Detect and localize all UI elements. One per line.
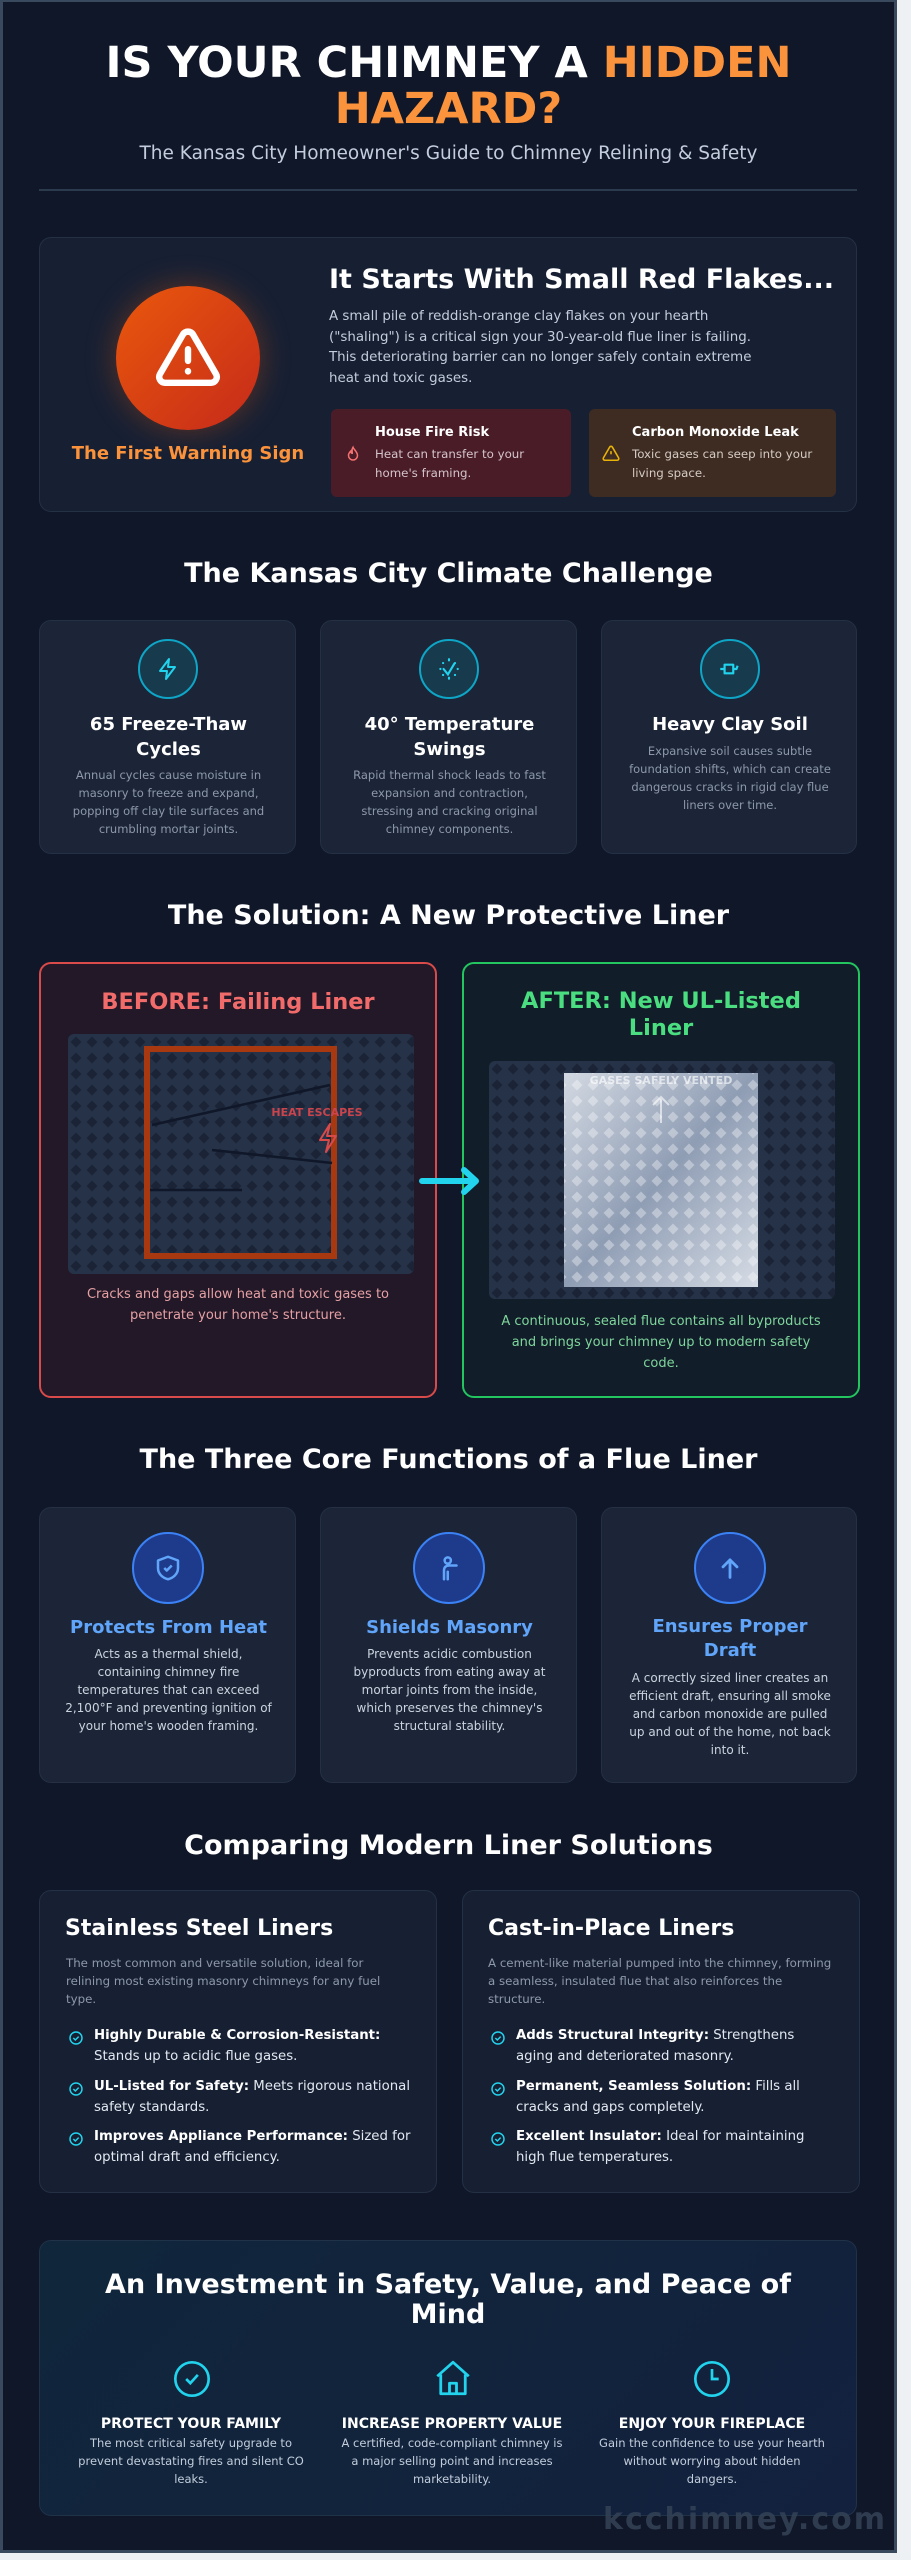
- callout: carbon monoxide: Carbon Monoxide Leak: [632, 425, 799, 440]
- panel: after: Liner: [629, 1015, 693, 1041]
- card: temperature swings: Swings: [413, 739, 486, 760]
- column: enjoy fireplace: [599, 2361, 825, 2486]
- panel: first warning sign: [39, 237, 857, 512]
- panel: after: [462, 962, 860, 1398]
- caption: [87, 1287, 389, 1323]
- callout: carbon monoxide: living space.: [632, 466, 706, 480]
- panel: investment: marketability.: [413, 2472, 491, 2486]
- panel: cast-in-place: a seamless, insulated flue that also reinforces the: [488, 1974, 782, 1988]
- panel: investment: a major selling point and increases: [351, 2454, 553, 2468]
- card: shields masonry: mortar joints from the inside,: [362, 1683, 537, 1697]
- subtitle: The Kansas City Homeowner's Guide to Chimney Relining & Safety: [140, 143, 757, 164]
- card: proper draft: efficient draft, ensuring all smoke: [629, 1689, 831, 1703]
- card: freeze-thaw: Annual cycles cause moisture in: [76, 768, 261, 782]
- panel: stainless steel: optimal draft and efficiency.: [94, 2150, 280, 2165]
- arrow: before to after: [419, 1167, 479, 1195]
- card: freeze-thaw: popping off clay tile surfaces and: [73, 804, 264, 818]
- card: shields masonry: Prevents acidic combustion: [367, 1647, 532, 1661]
- card: shields masonry: which preserves the chimney's: [357, 1701, 542, 1715]
- panel: stainless steel: type.: [66, 1992, 96, 2006]
- caption: A continuous, sealed flue contains all byproducts: [501, 1314, 821, 1329]
- panel: investment: A certified, code-compliant chimney is: [342, 2436, 562, 2450]
- text: shaling paragraph: heat and toxic gases.: [329, 371, 472, 386]
- card: protects from heat: Acts as a thermal shield,: [95, 1647, 242, 1661]
- card: temperature swings: [320, 620, 577, 854]
- heading: It Starts With Small Red Flakes...: [329, 264, 834, 295]
- card: freeze-thaw: Cycles: [136, 739, 201, 760]
- illustration: steel liner: [489, 1061, 835, 1299]
- caption: [501, 1314, 821, 1371]
- card: proper draft: Ensures Proper: [652, 1616, 808, 1637]
- heading: An Investment in Safety, Value, and Peace of: [105, 2269, 791, 2300]
- callout: carbon monoxide: Toxic gases can seep into your: [632, 447, 812, 461]
- panel: cast-in-place: Adds Structural Integrity: Strengthens: [516, 2028, 794, 2043]
- panel: stainless steel: safety standards.: [94, 2100, 209, 2115]
- caption: Cracks and gaps allow heat and toxic gases to: [87, 1287, 389, 1302]
- card: protects from heat: your home's wooden framing.: [79, 1719, 258, 1733]
- watermark: kcchimney.com: [603, 2502, 887, 2537]
- card: proper draft: [601, 1507, 857, 1783]
- panel: cast-in-place: high flue temperatures.: [516, 2150, 673, 2165]
- panel: investment: INCREASE PROPERTY VALUE: [342, 2416, 562, 2432]
- card: shields masonry: Shields Masonry: [366, 1617, 533, 1638]
- heading: climate challenge: The Kansas City Climate Challenge: [184, 558, 713, 589]
- panel: stainless steel: Stainless Steel Liners: [65, 1916, 333, 1941]
- card: protects from heat: [39, 1507, 296, 1783]
- callout: house fire risk: home's framing.: [375, 466, 471, 480]
- panel: cast-in-place: Permanent, Seamless Solution: Fills all: [516, 2079, 800, 2094]
- card: clay soil: Expansive soil causes subtle: [648, 744, 812, 758]
- card: temperature swings: stressing and cracking original: [361, 804, 538, 818]
- panel: cast-in-place: aging and deteriorated masonry.: [516, 2049, 734, 2064]
- card: protects from heat: temperatures that can exceed: [77, 1683, 260, 1697]
- panel: investment: prevent devastating fires and silent CO: [78, 2454, 304, 2468]
- card: temperature swings: expansion and contraction,: [371, 786, 528, 800]
- icon: warning circle: [116, 286, 260, 430]
- panel: after: AFTER: New UL-Listed: [521, 988, 801, 1014]
- card: proper draft: into it.: [711, 1743, 749, 1757]
- icon: flame: [348, 446, 358, 461]
- card: shields masonry: byproducts from eating away at: [354, 1665, 546, 1679]
- card: clay soil: Heavy Clay Soil: [652, 714, 808, 735]
- card: clay soil: liners over time.: [683, 798, 777, 812]
- panel: cast-in-place: Excellent Insulator: Ideal for maintaining: [516, 2129, 804, 2144]
- heading: [105, 2269, 792, 2330]
- card: clay soil: [601, 620, 857, 854]
- illustration: cracked liner: HEAT ESCAPES: [271, 1106, 363, 1119]
- heading: three core functions: The Three Core Functions of a Flue Liner: [140, 1444, 757, 1475]
- panel: cast-in-place: structure.: [488, 1992, 545, 2006]
- heading: solution: The Solution: A New Protective Liner: [168, 900, 729, 931]
- panel: investment: ENJOY YOUR FIREPLACE: [619, 2416, 805, 2432]
- panel: stainless steel: The most common and versatile solution, ideal for: [66, 1956, 363, 1970]
- caption: penetrate your home's structure.: [130, 1308, 346, 1323]
- text: shaling paragraph: A small pile of reddish-orange clay flakes on your hearth: [329, 309, 708, 324]
- panel: stainless steel: Improves Appliance Performance: Sized for: [94, 2129, 410, 2144]
- card: protects from heat: Protects From Heat: [70, 1617, 267, 1638]
- panel: stainless steel: Highly Durable & Corrosion-Resistant:: [94, 2028, 380, 2043]
- card: shields masonry: [320, 1507, 577, 1783]
- card: proper draft: up and out of the home, not back: [629, 1725, 831, 1739]
- panel: stainless steel: UL-Listed for Safety: Meets rigorous national: [94, 2079, 410, 2094]
- panel: cast-in-place: Cast-in-Place Liners: [488, 1916, 734, 1941]
- card: proper draft: and carbon monoxide are pulled: [633, 1707, 827, 1721]
- panel: investment: leaks.: [174, 2472, 208, 2486]
- card: freeze-thaw: 65 Freeze-Thaw: [90, 714, 247, 735]
- panel: investment: The most critical safety upgrade to: [90, 2436, 292, 2450]
- panel: before: BEFORE: Failing Liner: [101, 989, 375, 1015]
- card: temperature swings: 40° Temperature: [365, 714, 534, 735]
- column: property value: [342, 2360, 562, 2486]
- text: shaling paragraph: ("shaling") is a critical sign your 30-year-old flue liner is failing.: [329, 330, 751, 345]
- text: shaling paragraph: This deteriorating barrier can no longer safely contain extreme: [329, 350, 751, 365]
- caption: code.: [643, 1356, 679, 1371]
- title: [106, 38, 791, 134]
- heading: Mind: [411, 2299, 485, 2330]
- callout: house fire risk: [331, 409, 571, 497]
- panel: stainless steel: [39, 1890, 437, 2193]
- card: freeze-thaw: [39, 620, 296, 854]
- callout: house fire risk: Heat can transfer to your: [375, 447, 524, 461]
- panel: investment: PROTECT YOUR FAMILY: [101, 2416, 281, 2432]
- card: shields masonry: structural stability.: [394, 1719, 505, 1733]
- panel: investment: without worrying about hidden: [623, 2454, 801, 2468]
- panel: cast-in-place: A cement-like material pumped into the chimney, forming: [488, 1956, 831, 1970]
- title: HAZARD?: [335, 84, 562, 134]
- title: IS YOUR CHIMNEY A HIDDEN: [106, 38, 791, 88]
- panel: investment: dangers.: [687, 2472, 737, 2486]
- panel: functions: [39, 1507, 857, 1783]
- card: freeze-thaw: crumbling mortar joints.: [99, 822, 238, 836]
- text: shaling paragraph: [328, 309, 751, 386]
- label: first warning sign: The First Warning Sign: [72, 443, 304, 464]
- panel: stainless steel: Stands up to acidic flue gases.: [94, 2049, 297, 2064]
- panel: cast-in-place: cracks and gaps completely.: [516, 2100, 705, 2115]
- panel: cast-in-place: [462, 1890, 860, 2193]
- panel: investment: [39, 2240, 857, 2516]
- callout: carbon monoxide: [589, 409, 836, 497]
- card: temperature swings: chimney components.: [386, 822, 513, 836]
- illustration: steel liner: GASES SAFELY VENTED: [590, 1074, 732, 1087]
- panel: stainless steel: relining most existing masonry chimneys for any fuel: [66, 1974, 380, 1988]
- bullet list: [69, 2028, 410, 2165]
- column: protect family: [78, 2361, 304, 2486]
- panel: climate cards: [39, 620, 857, 854]
- panel: investment: Gain the confidence to use your hearth: [599, 2436, 825, 2450]
- card: proper draft: A correctly sized liner creates an: [632, 1671, 828, 1685]
- heading: comparing liners: Comparing Modern Liner Solutions: [184, 1830, 713, 1861]
- illustration: cracked liner: [68, 1034, 414, 1274]
- card: proper draft: Draft: [704, 1640, 756, 1661]
- card: temperature swings: Rapid thermal shock leads to fast: [353, 768, 546, 782]
- panel: before: [39, 962, 437, 1398]
- bullet list: [491, 2028, 804, 2165]
- card: protects from heat: 2,100°F and preventing ignition of: [65, 1701, 272, 1715]
- icon: warning: [602, 446, 620, 461]
- caption: and brings your chimney up to modern safety: [512, 1335, 810, 1350]
- card: clay soil: foundation shifts, which can create: [629, 762, 831, 776]
- card: freeze-thaw: masonry to freeze and expand,: [79, 786, 258, 800]
- callout: house fire risk: House Fire Risk: [375, 425, 489, 440]
- card: protects from heat: containing chimney fire: [98, 1665, 239, 1679]
- card: clay soil: dangerous cracks in rigid clay flue: [631, 780, 829, 794]
